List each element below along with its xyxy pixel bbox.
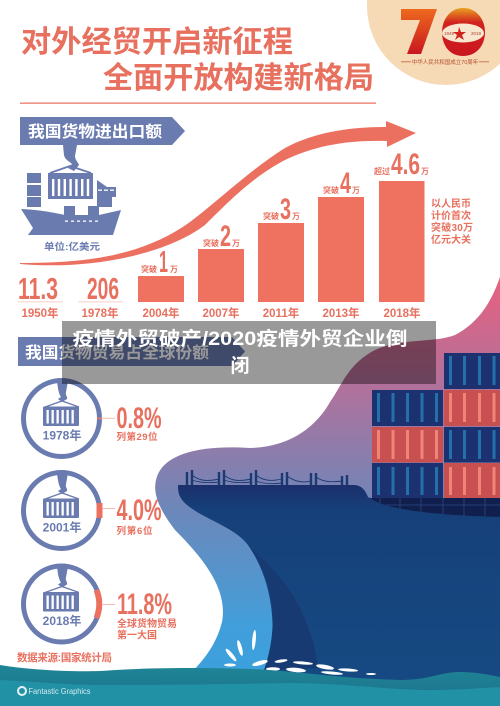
bar 2004: 万	[170, 265, 178, 274]
annotation: RMB note: 计价首次	[431, 209, 471, 222]
bar 2007: 2	[220, 220, 231, 253]
bar 2007	[198, 220, 244, 320]
bar 2011: 万	[292, 212, 300, 221]
bar 1950: 11.3	[18, 271, 58, 306]
brand: Fantastic Graphics: Fantastic Graphics	[28, 686, 90, 696]
annotation: RMB note: 以人民币	[431, 198, 471, 210]
containers	[370, 353, 500, 520]
railing	[187, 470, 347, 491]
share ring 1978	[24, 380, 162, 456]
bar 2007: 万	[232, 239, 240, 248]
background: pink to blue wave shape	[155, 277, 500, 690]
bar 2013	[318, 167, 364, 320]
logo numeral 0	[442, 8, 485, 56]
share ring 2018	[24, 566, 177, 642]
bar 2013: 万	[352, 186, 360, 195]
bar 2018	[374, 148, 429, 320]
overlay caption band: 闭	[230, 355, 250, 377]
value 0.8%: 0.8%	[116, 402, 162, 435]
hull	[178, 485, 500, 690]
logo star	[453, 27, 466, 40]
logo: 70th anniversary badge: 2019	[471, 31, 482, 36]
icon: container	[43, 473, 79, 518]
bar 1978: 206	[87, 271, 119, 306]
bar 2018: 超过	[374, 166, 390, 176]
growth arrow	[20, 121, 416, 265]
bar 2007: 2007年	[202, 306, 240, 320]
share ring 2001	[24, 472, 162, 548]
bar 2013: 突破	[323, 185, 339, 195]
bar 2004: 1	[159, 244, 168, 279]
icon: container	[43, 566, 79, 612]
ribbon: import export heading: 我国货物进出口额	[28, 122, 162, 141]
title: 全面开放构建新格局	[103, 62, 374, 95]
icon: container	[43, 381, 79, 426]
bar 2004: 2004年	[142, 306, 180, 320]
ribbon: global share heading: 我国货物贸易占全球份额	[25, 343, 209, 362]
share ring 1978: 1978年	[43, 428, 81, 442]
ribbon: import export heading	[20, 117, 185, 145]
title	[21, 26, 374, 95]
bar 1978	[78, 271, 123, 320]
bar 2011	[258, 193, 304, 320]
ribbon: global share heading	[18, 337, 245, 366]
logo: 70th anniversary badge: 1949	[444, 31, 455, 36]
bar 1950	[18, 271, 63, 320]
bow splash	[224, 630, 376, 675]
share ring 2001: 2001年	[43, 520, 81, 534]
logo: 70th anniversary badge	[367, 0, 500, 85]
bar 2013: 2013年	[322, 306, 360, 320]
annotation: RMB note: 亿元大关	[431, 233, 471, 246]
value 11.8%: 11.8%	[117, 588, 172, 621]
logo caption: 中华人民共和国成立70周年	[412, 58, 479, 66]
share ring 1978: 列第29位	[116, 431, 158, 443]
bar 2011: 2011年	[263, 306, 300, 320]
share ring 2018: 全球货物贸易	[117, 617, 177, 630]
value 4.0%: 4.0%	[116, 494, 162, 527]
bar 2004	[138, 244, 184, 320]
icon: cargo ship with crane hook	[21, 145, 121, 235]
bar 1978: 1978年	[81, 306, 119, 320]
bar 2007: 突破	[203, 238, 219, 248]
unit label: 单位:亿美元	[44, 241, 101, 253]
bar 2018: 2018年	[383, 306, 421, 320]
logo numeral 7	[401, 9, 437, 54]
title: 对外经贸开启新征程	[21, 26, 293, 59]
bar chart: import export values	[18, 148, 429, 320]
bar 1950: 1950年	[21, 306, 59, 320]
bar 2018: 4.6	[391, 148, 420, 181]
bar 2011: 3	[280, 193, 291, 226]
annotation: RMB note: 突破30万	[431, 221, 473, 234]
data source: 数据来源:国家统计局	[17, 651, 112, 664]
bar 2004: 突破	[141, 264, 157, 274]
bar 2011: 突破	[263, 211, 279, 221]
overlay caption band: 疫情外贸破产/2020疫情外贸企业倒	[72, 327, 408, 350]
bar 2013: 4	[340, 167, 351, 200]
ship	[178, 353, 500, 690]
share ring 2018: 第一大国	[117, 628, 157, 642]
bar 2018: 万	[421, 167, 429, 176]
share ring 2018: 2018年	[43, 613, 81, 628]
share ring 2001: 列第6位	[116, 525, 153, 537]
overlay caption band	[62, 321, 436, 384]
sea waves	[0, 665, 500, 706]
annotation: RMB note	[431, 198, 473, 246]
